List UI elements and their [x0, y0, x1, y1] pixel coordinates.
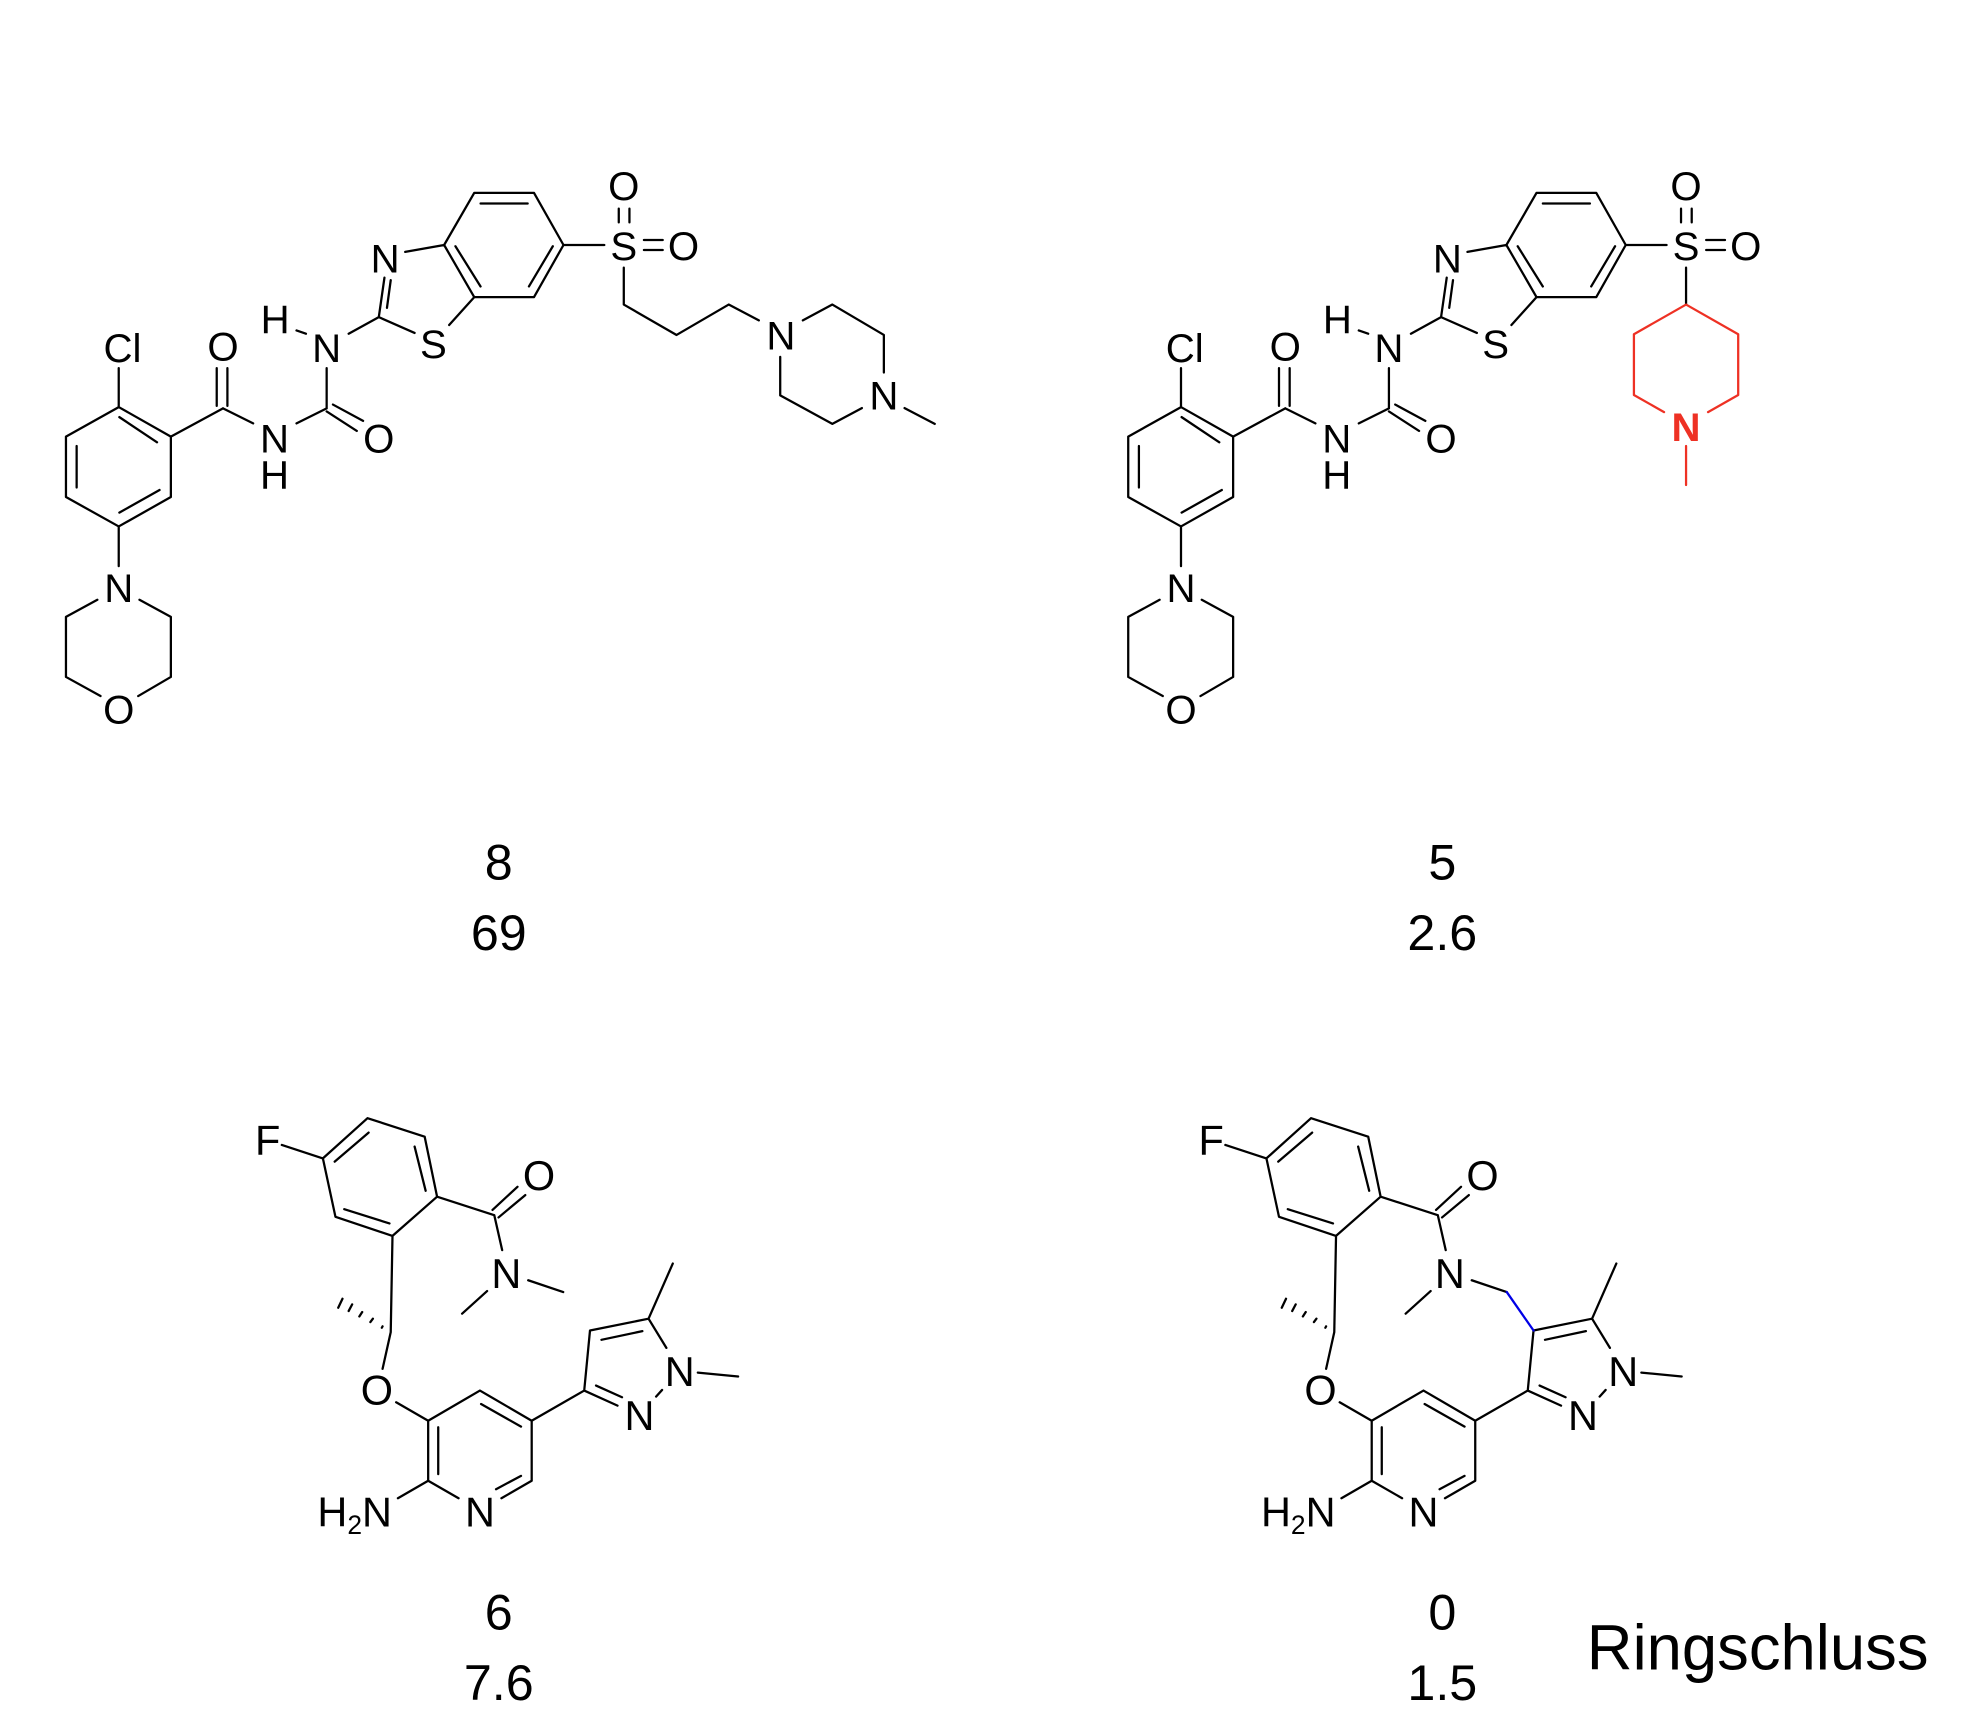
values: compound 0: 0	[1428, 1585, 1456, 1641]
atom labels: compound 6: H	[317, 1489, 347, 1536]
atom labels: compound 5: S	[1482, 322, 1509, 367]
atom labels: compound 5: Cl	[1166, 326, 1204, 371]
values: compound 8: 69	[471, 905, 527, 961]
molecule: compound 5 structure	[1128, 164, 1761, 733]
atom labels: compound 8: O	[668, 224, 699, 269]
atom labels: compound 8: N	[312, 326, 341, 371]
atom labels: compound 0: N	[1409, 1489, 1438, 1536]
atom labels: compound 8: O	[207, 325, 239, 370]
atom labels: compound 6	[255, 1117, 695, 1540]
atom labels: compound 5: O	[1730, 224, 1761, 269]
atom labels: compound 8: N	[260, 416, 289, 461]
values: compound 0: 1.5	[1407, 1655, 1477, 1711]
highlighted red N-methylpiperidine ring: N	[1672, 405, 1701, 450]
atom labels: compound 6: N	[625, 1392, 654, 1439]
atom labels: compound 8: S	[610, 224, 637, 269]
values: compound 5: 5	[1428, 834, 1456, 890]
atom labels: compound 6: N	[362, 1489, 392, 1536]
atom labels: compound 5: H	[1323, 297, 1352, 342]
atom labels: compound 6: O	[523, 1152, 555, 1199]
atom labels: compound 8: S	[420, 322, 447, 367]
atom labels: compound 6: N	[491, 1250, 521, 1297]
atom labels: compound 8: H	[260, 453, 289, 498]
values: compound 5: 2.6	[1407, 905, 1477, 961]
atom labels: compound 5: O	[1670, 164, 1702, 209]
values: compound 5	[1407, 834, 1477, 961]
atom labels: compound 0: F	[1198, 1117, 1224, 1164]
highlighted red N-methylpiperidine ring	[1634, 305, 1738, 485]
molecule: compound 6 structure	[255, 1117, 738, 1540]
blue ring-closing bond	[1507, 1292, 1534, 1331]
atom labels: compound 5	[1165, 164, 1761, 733]
atom labels: compound 0: 2	[1291, 1510, 1306, 1540]
atom labels: compound 6: N	[665, 1348, 695, 1395]
values: compound 6: 6	[485, 1585, 513, 1641]
atom labels: compound 8: O	[363, 416, 394, 461]
atom labels: compound 8: N	[766, 313, 795, 358]
atom labels: compound 0: N	[1306, 1489, 1336, 1536]
atom labels: compound 5: N	[1374, 326, 1403, 371]
atom labels: compound 8: Cl	[104, 326, 141, 371]
atom labels: compound 8: O	[608, 164, 639, 209]
caption: Ringschluss: Ringschluss	[1587, 1612, 1929, 1684]
atom labels: compound 6: 2	[347, 1510, 362, 1540]
atom labels: compound 5: O	[1425, 416, 1457, 461]
atom labels: compound 6: N	[465, 1489, 495, 1536]
values: compound 0	[1407, 1585, 1477, 1711]
atom labels: compound 5: H	[1322, 453, 1351, 498]
atom labels: compound 5: N	[1166, 566, 1196, 611]
values: compound 6: 7.6	[464, 1655, 534, 1711]
atom labels: compound 8: O	[103, 688, 134, 733]
atom labels: compound 0: O	[1304, 1367, 1337, 1414]
atom labels: compound 8: N	[104, 566, 133, 611]
atom labels: compound 0: O	[1466, 1152, 1499, 1199]
atom labels: compound 0: N	[1435, 1250, 1465, 1297]
molecule: compound 0 macrocycle structure	[1198, 1117, 1682, 1540]
atom labels: compound 8	[103, 164, 898, 733]
molecule: compound 8 structure	[66, 164, 935, 733]
atom labels: compound 6: O	[361, 1367, 393, 1414]
atom labels: compound 8: H	[261, 297, 290, 342]
atom labels: compound 0: H	[1261, 1489, 1291, 1536]
values: compound 6	[464, 1585, 534, 1711]
atom labels: compound 0: N	[1568, 1392, 1598, 1439]
atom labels: compound 0: N	[1608, 1348, 1638, 1395]
values: compound 8: 8	[485, 834, 513, 890]
atom labels: compound 5: N	[1433, 237, 1462, 282]
atom labels: compound 5: S	[1673, 224, 1699, 269]
atom labels: compound 6: F	[255, 1117, 280, 1164]
atom labels: compound 5: O	[1165, 688, 1197, 733]
atom labels: compound 8: N	[869, 374, 898, 419]
values: compound 8	[471, 834, 527, 961]
atom labels: compound 5: O	[1270, 325, 1301, 370]
atom labels: compound 8: N	[371, 237, 400, 282]
atom labels: compound 0	[1198, 1117, 1638, 1540]
atom labels: compound 5: N	[1322, 416, 1351, 461]
